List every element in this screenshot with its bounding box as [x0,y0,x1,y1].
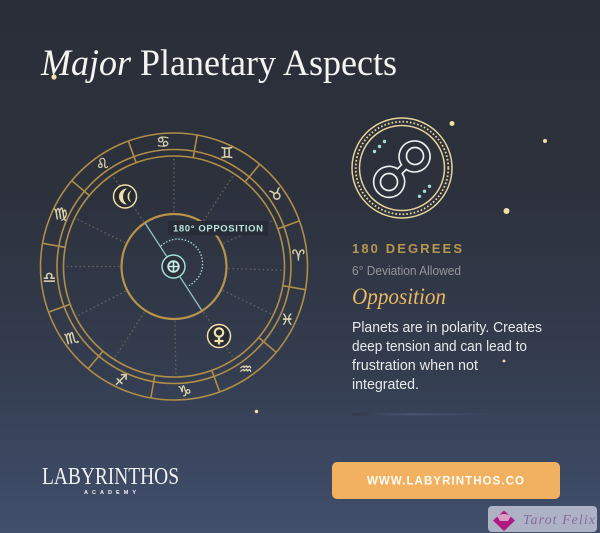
description: integrated. [352,377,419,393]
dumbbell symbol [374,141,430,197]
button: WWW.LABYRINTHOS.CO [367,476,524,488]
divider [352,413,497,416]
wheel rings [40,133,308,400]
opposition line [145,223,202,310]
title: Major Planetary Aspects [40,43,397,84]
aspect label [168,221,268,236]
teal dots [373,140,431,198]
zodiac dividers [43,135,305,398]
icon: lotus [493,510,515,531]
icon: opposition medallion [352,118,452,218]
logo: ACADEMY [84,490,136,496]
watermark [488,506,597,532]
icon: earth [162,255,185,278]
stars [51,74,547,413]
description: frustration when not [352,358,478,374]
zodiac glyphs: ♒︎ [239,360,252,378]
dotted aspect arc [161,239,203,286]
description: deep tension and can lead to [352,339,527,355]
inner circle [122,214,226,319]
zodiac glyphs [43,133,305,401]
icon: moon [114,185,136,208]
button [332,462,560,499]
icon: venus [208,324,230,348]
zodiac glyphs: ♓︎ [281,310,294,328]
zodiac glyphs: ♉︎ [267,184,286,206]
aspect name: Opposition [352,284,446,309]
zodiac glyphs: ♈︎ [292,247,305,265]
house dotted lines [66,159,281,374]
zodiac wheel [40,133,308,401]
zodiac glyphs: ♍︎ [53,204,69,224]
zodiac glyphs: ♋︎ [156,133,170,151]
degrees heading: 180 DEGREES [352,241,462,256]
zodiac glyphs: ♏︎ [63,328,81,349]
logo: LABYRINTHOS [42,464,179,490]
zodiac glyphs: ♌︎ [93,153,112,175]
logo [42,464,179,496]
description: Planets are in polarity. Creates [352,320,542,336]
watermark: Tarot Felix [523,513,596,528]
zodiac glyphs: ♐︎ [114,371,128,389]
aspect label: 180° OPPOSITION [173,224,263,234]
zodiac glyphs: ♎︎ [43,268,56,286]
zodiac glyphs: ♑︎ [177,381,193,401]
zodiac glyphs: ♊︎ [220,144,234,162]
description [352,320,542,393]
deviation note: 6° Deviation Allowed [352,263,461,278]
